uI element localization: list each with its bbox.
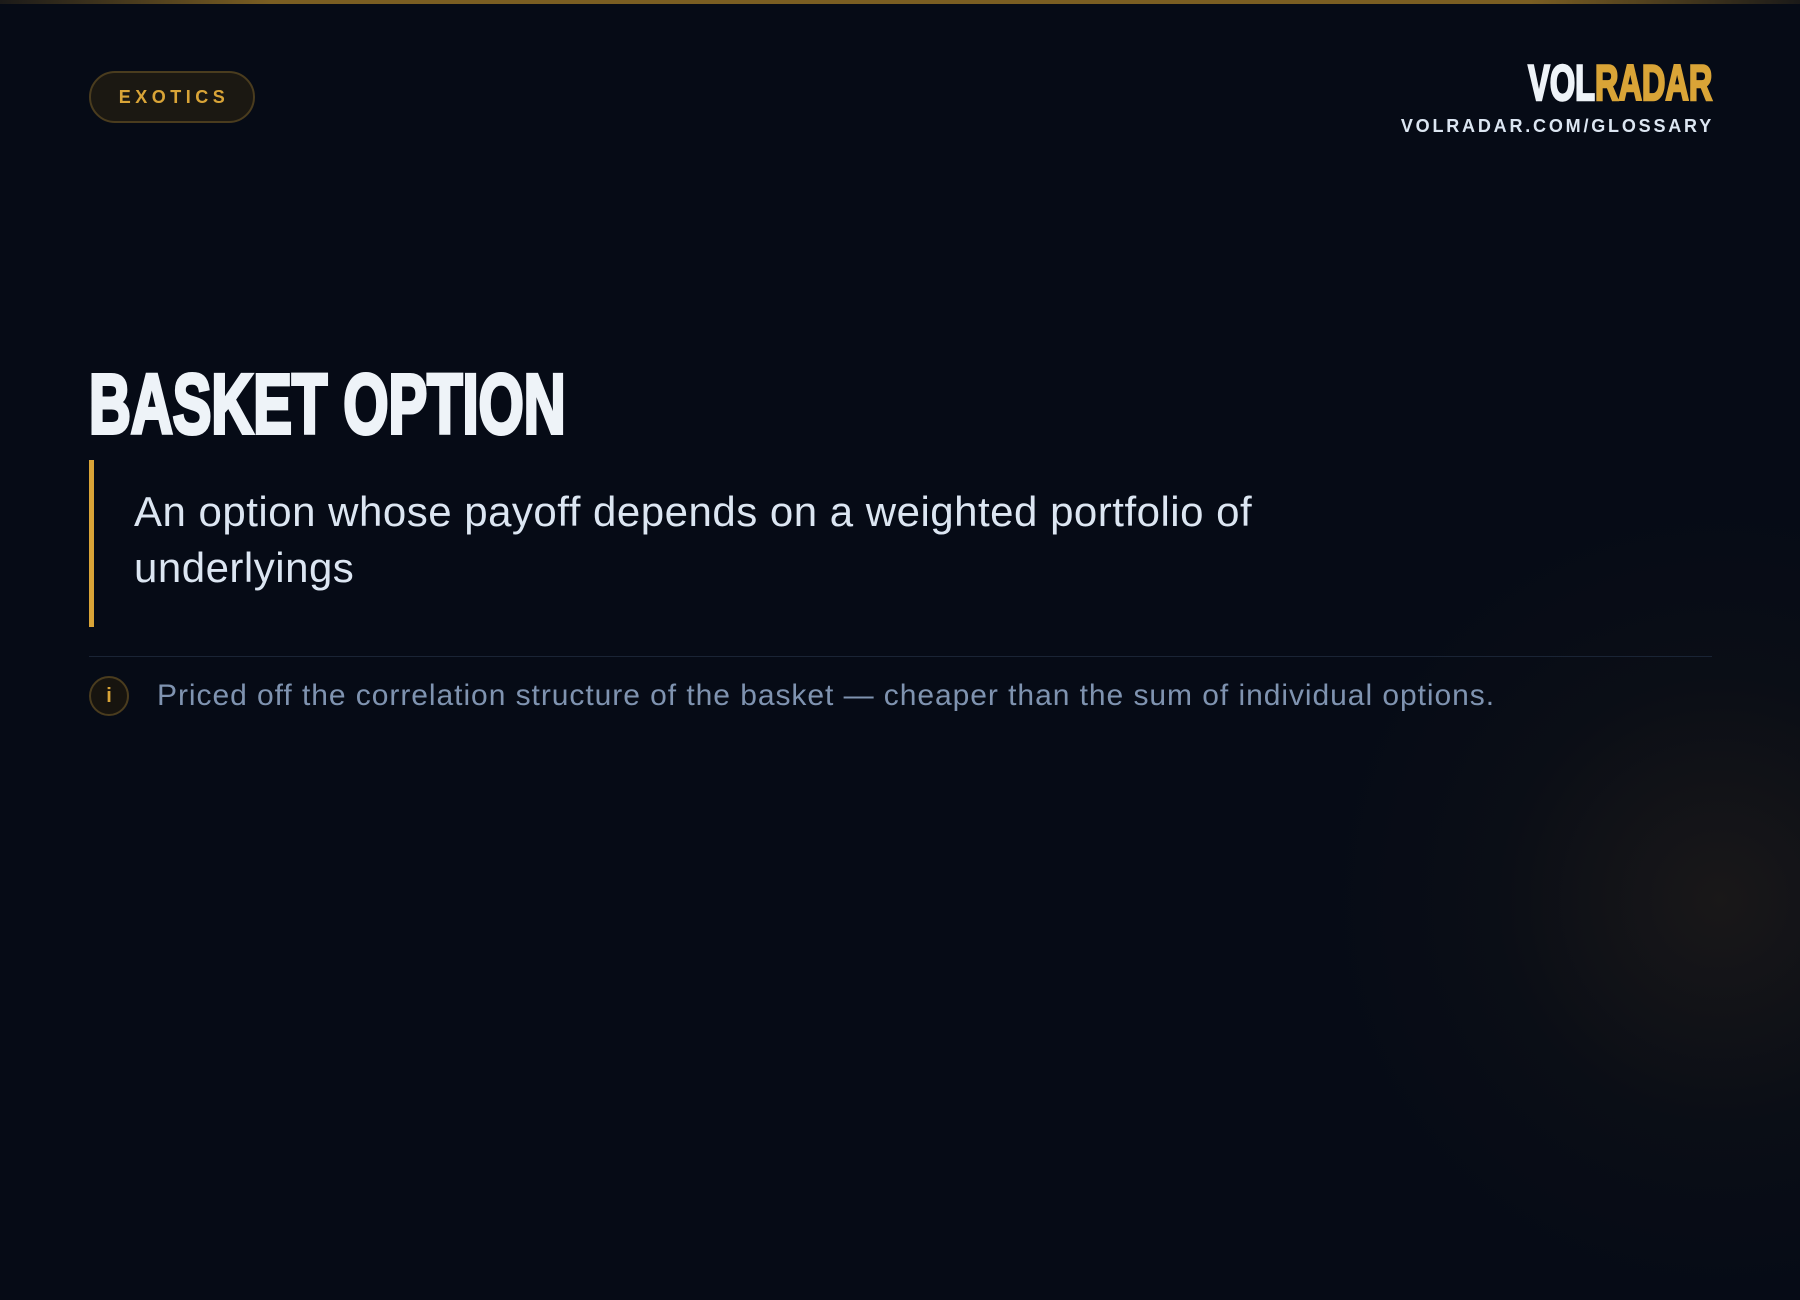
title: BASKET OPTION [89, 357, 566, 451]
definition quote: underlyings [134, 544, 354, 591]
definition quote [89, 460, 1389, 627]
url: VOLRADAR.COM/GLOSSARY [1401, 116, 1714, 136]
icon: info: i [106, 684, 112, 706]
icon: info [89, 676, 129, 716]
note text: Priced off the correlation structure of the basket — cheaper than the sum of individual options. [157, 679, 1495, 712]
brand block [1401, 55, 1714, 136]
definition quote: An option whose payoff depends on a weighted portfolio of [134, 488, 1252, 535]
category pill: EXOTICS [119, 86, 229, 106]
logo: VOLRADAR [1528, 55, 1712, 111]
category pill [89, 71, 255, 123]
note row [89, 676, 1495, 716]
